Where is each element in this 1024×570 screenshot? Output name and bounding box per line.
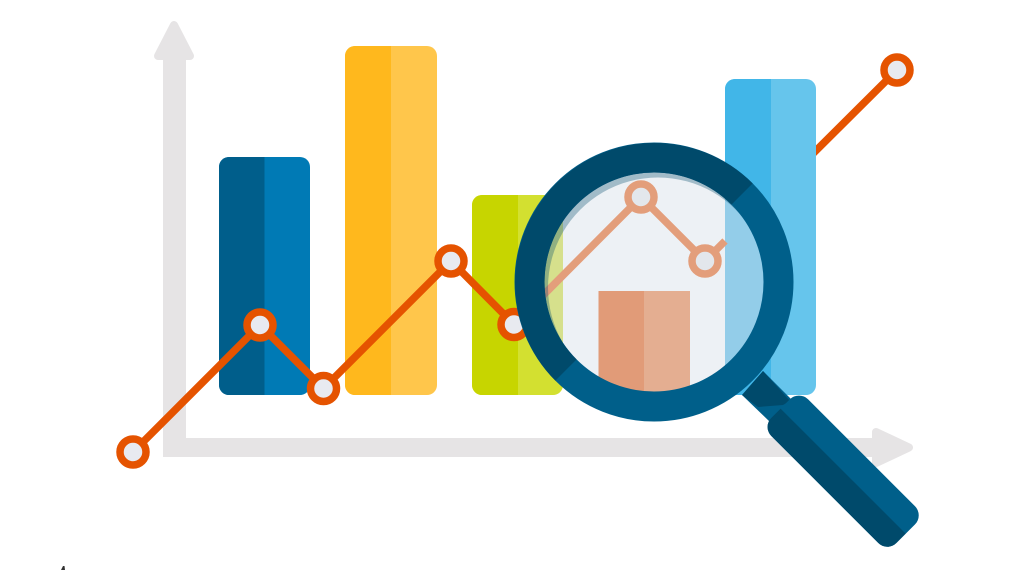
marker 1 [120, 439, 146, 465]
magnifying glass [514, 142, 919, 547]
vertical axis arrow [158, 25, 190, 457]
bar: dark blue [219, 157, 310, 395]
lens background [563, 172, 725, 386]
bar: light blue [725, 79, 816, 395]
orange trend line with markers [120, 57, 910, 465]
faded green bar [544, 222, 563, 342]
handle neck [742, 371, 792, 422]
chart axes [158, 25, 909, 463]
small dark mark at bottom edge [61, 566, 65, 570]
faded blue bar [725, 199, 764, 366]
horizontal axis arrow [163, 432, 909, 463]
bar: yellow [345, 46, 437, 395]
marker 2 [247, 312, 273, 338]
lens contents, magnified and faded [544, 172, 764, 392]
marker 3 [310, 376, 336, 402]
marker 6 [884, 57, 910, 83]
faded orange bar [598, 291, 690, 401]
marker 5 [501, 312, 527, 338]
lens inner shadow [544, 172, 740, 342]
handle grip [768, 396, 919, 547]
bar: green [472, 195, 563, 395]
faded trend line [544, 180, 728, 298]
lens ring [515, 143, 778, 406]
marker 4 [438, 248, 464, 274]
